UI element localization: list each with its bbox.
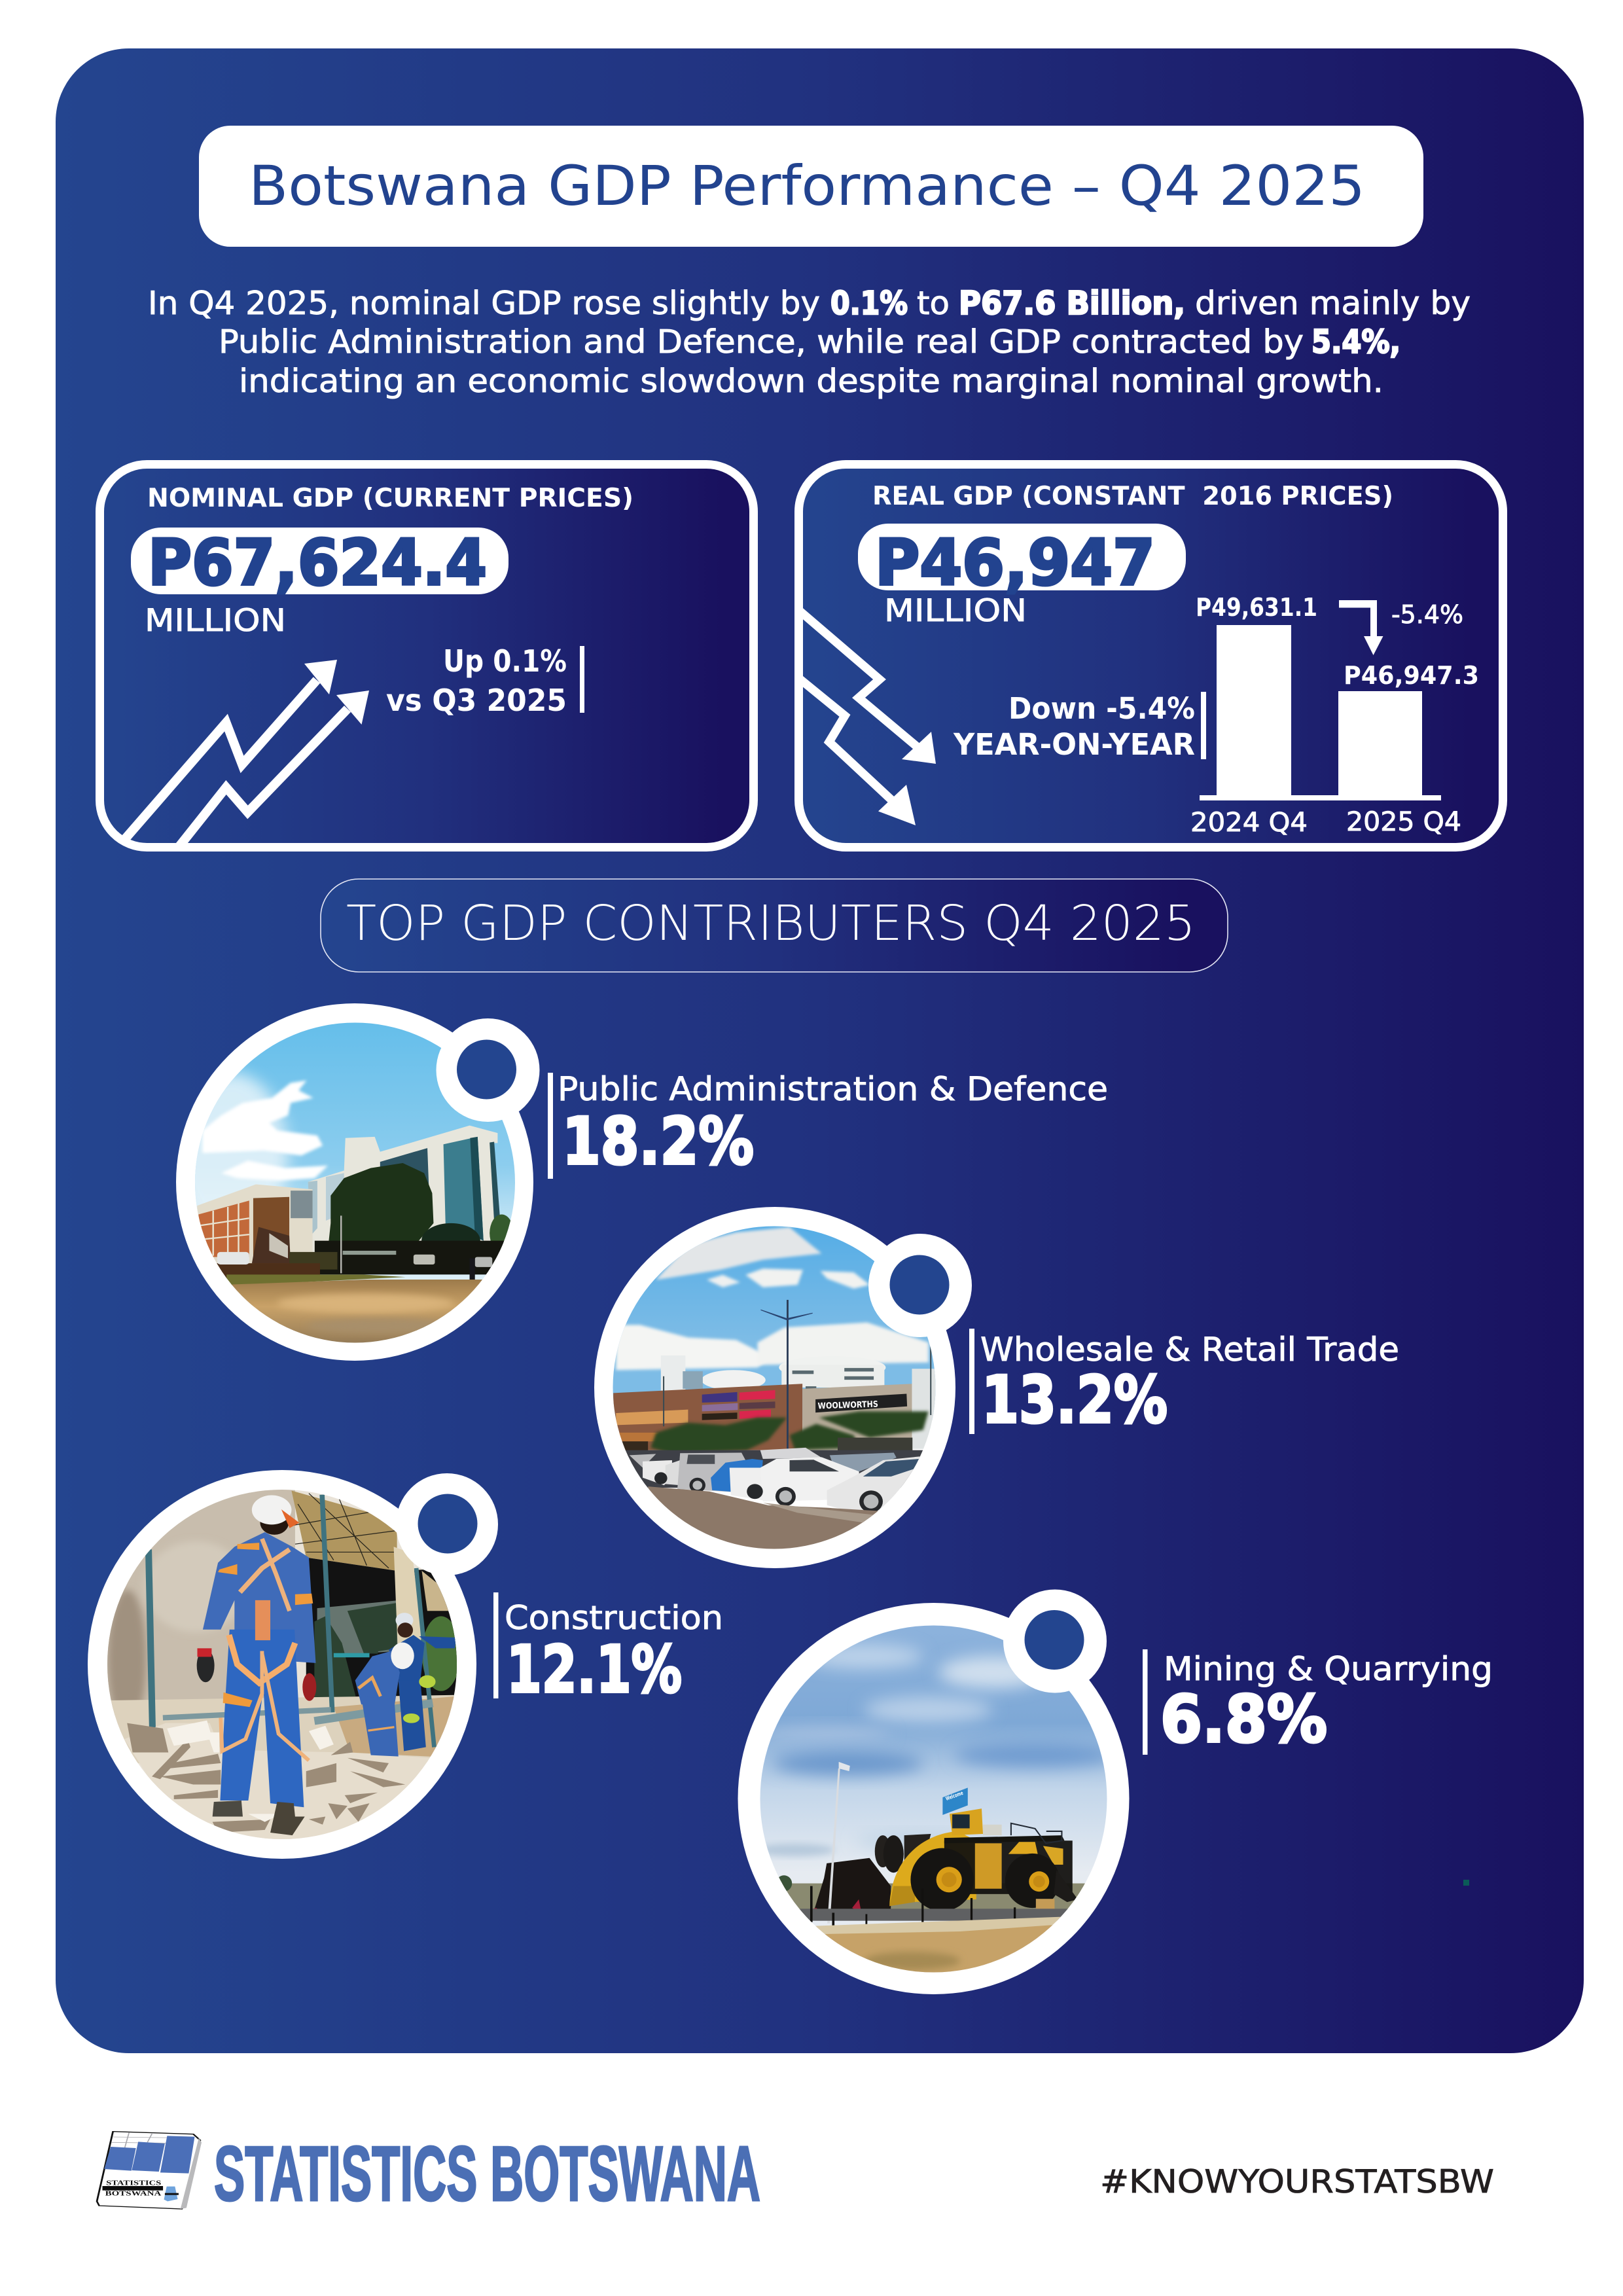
bar 2024 Q4: P49,631.1 — [1196, 593, 1317, 622]
bent arrow — [1339, 600, 1383, 655]
marker badge — [396, 1473, 498, 1575]
unit label: MILLION — [145, 603, 286, 639]
marker badge — [868, 1234, 972, 1337]
photo: mining wheel loader — [747, 1611, 1120, 1985]
sector share: 12.1% — [507, 1632, 682, 1708]
title banner — [199, 126, 1423, 247]
hashtag: #KNOWYOURSTATSBW — [1100, 2163, 1494, 2200]
stray green dot — [1463, 1880, 1469, 1886]
sector name: Mining & Quarrying — [1164, 1650, 1493, 1688]
falling arrows icon — [797, 609, 936, 825]
change note: vs Q3 2025 — [386, 683, 567, 718]
contributor: public administration and defence — [176, 1003, 1108, 1361]
nominal GDP heading: NOMINAL GDP (CURRENT PRICES) — [147, 484, 633, 513]
unit label: MILLION — [884, 593, 1027, 629]
photo: shopping mall car park — [613, 1227, 936, 1549]
real GDP heading: REAL GDP (CONSTANT 2016 PRICES) — [872, 482, 1393, 511]
contributor: wholesale and retail trade — [594, 1207, 1399, 1568]
marker badge — [436, 1018, 539, 1122]
footer logo: statistics book icon: BOTSWANA — [105, 2190, 161, 2197]
rising arrows icon — [124, 660, 369, 846]
sector share: 13.2% — [982, 1363, 1168, 1438]
photo: mining wheel loader: Welcome — [944, 1789, 964, 1802]
section heading: top contributors — [321, 879, 1228, 972]
panel: nominal GDP — [99, 465, 754, 847]
panel: real GDP — [797, 465, 1503, 847]
photo: construction workers — [99, 1480, 471, 1854]
change note: Down -5.4% — [1008, 691, 1195, 726]
bar 2025 Q4: 2025 Q4 — [1346, 807, 1461, 837]
change note — [953, 691, 1206, 762]
label divider — [1143, 1649, 1148, 1755]
sector name: Wholesale & Retail Trade — [980, 1331, 1399, 1369]
footer logo: statistics book icon — [97, 2132, 202, 2209]
nominal GDP value pill: P67,624.4 — [148, 526, 487, 600]
label divider — [493, 1592, 499, 1698]
intro paragraph: indicating an economic slowdown despite marginal nominal growth. — [239, 363, 1383, 400]
change note: YEAR-ON-YEAR — [953, 727, 1195, 762]
photo ring — [88, 1470, 476, 1859]
photo ring — [738, 1603, 1130, 1994]
label divider — [548, 1073, 553, 1179]
intro paragraph: In Q4 2025, nominal GDP rose slightly by — [148, 285, 820, 322]
contributor: construction — [88, 1470, 723, 1859]
section heading: top contributors: TOP GDP CONTRIBUTERS Q4 2025 — [346, 895, 1196, 952]
bar chart — [1190, 593, 1479, 838]
title text: Botswana GDP Performance – Q4 2025 — [249, 154, 1365, 218]
intro paragraph: to — [917, 285, 950, 322]
intro paragraph: driven mainly by — [1195, 285, 1471, 322]
intro paragraph — [148, 285, 1471, 400]
marker badge — [1003, 1589, 1107, 1693]
bar 2025 Q4: P46,947.3 — [1344, 661, 1479, 690]
photo ring — [594, 1207, 955, 1568]
footer logo: statistics book icon: STATISTICS — [106, 2179, 161, 2187]
sector name: Public Administration & Defence — [558, 1070, 1108, 1108]
bar 2024 Q4: 2024 Q4 — [1190, 808, 1308, 838]
intro paragraph: 0.1% — [830, 285, 908, 322]
sector share: 6.8% — [1160, 1682, 1327, 1757]
footer wordmark: STATISTICS BOTSWANA — [214, 2130, 760, 2217]
intro paragraph: Public Administration and Defence, while real GDP contracted by — [219, 323, 1304, 361]
bar 2025 Q4 — [1338, 661, 1479, 837]
sector name: Construction — [505, 1599, 723, 1637]
contributor: mining and quarrying — [738, 1589, 1493, 1994]
intro paragraph: 5.4%, — [1311, 323, 1400, 361]
bar 2024 Q4 — [1190, 593, 1317, 838]
photo ring — [176, 1003, 533, 1361]
sector share: 18.2% — [562, 1104, 754, 1179]
photo: government buildings — [195, 1022, 515, 1343]
photo: shopping mall car park: WOOLWORTHS — [817, 1400, 878, 1411]
intro paragraph: P67.6 Billion, — [959, 285, 1185, 322]
label divider — [969, 1329, 974, 1434]
real GDP value pill: P46,947 — [875, 526, 1155, 600]
change note — [386, 643, 584, 718]
percent change: -5.4% — [1391, 600, 1463, 629]
change note: Up 0.1% — [443, 643, 567, 679]
